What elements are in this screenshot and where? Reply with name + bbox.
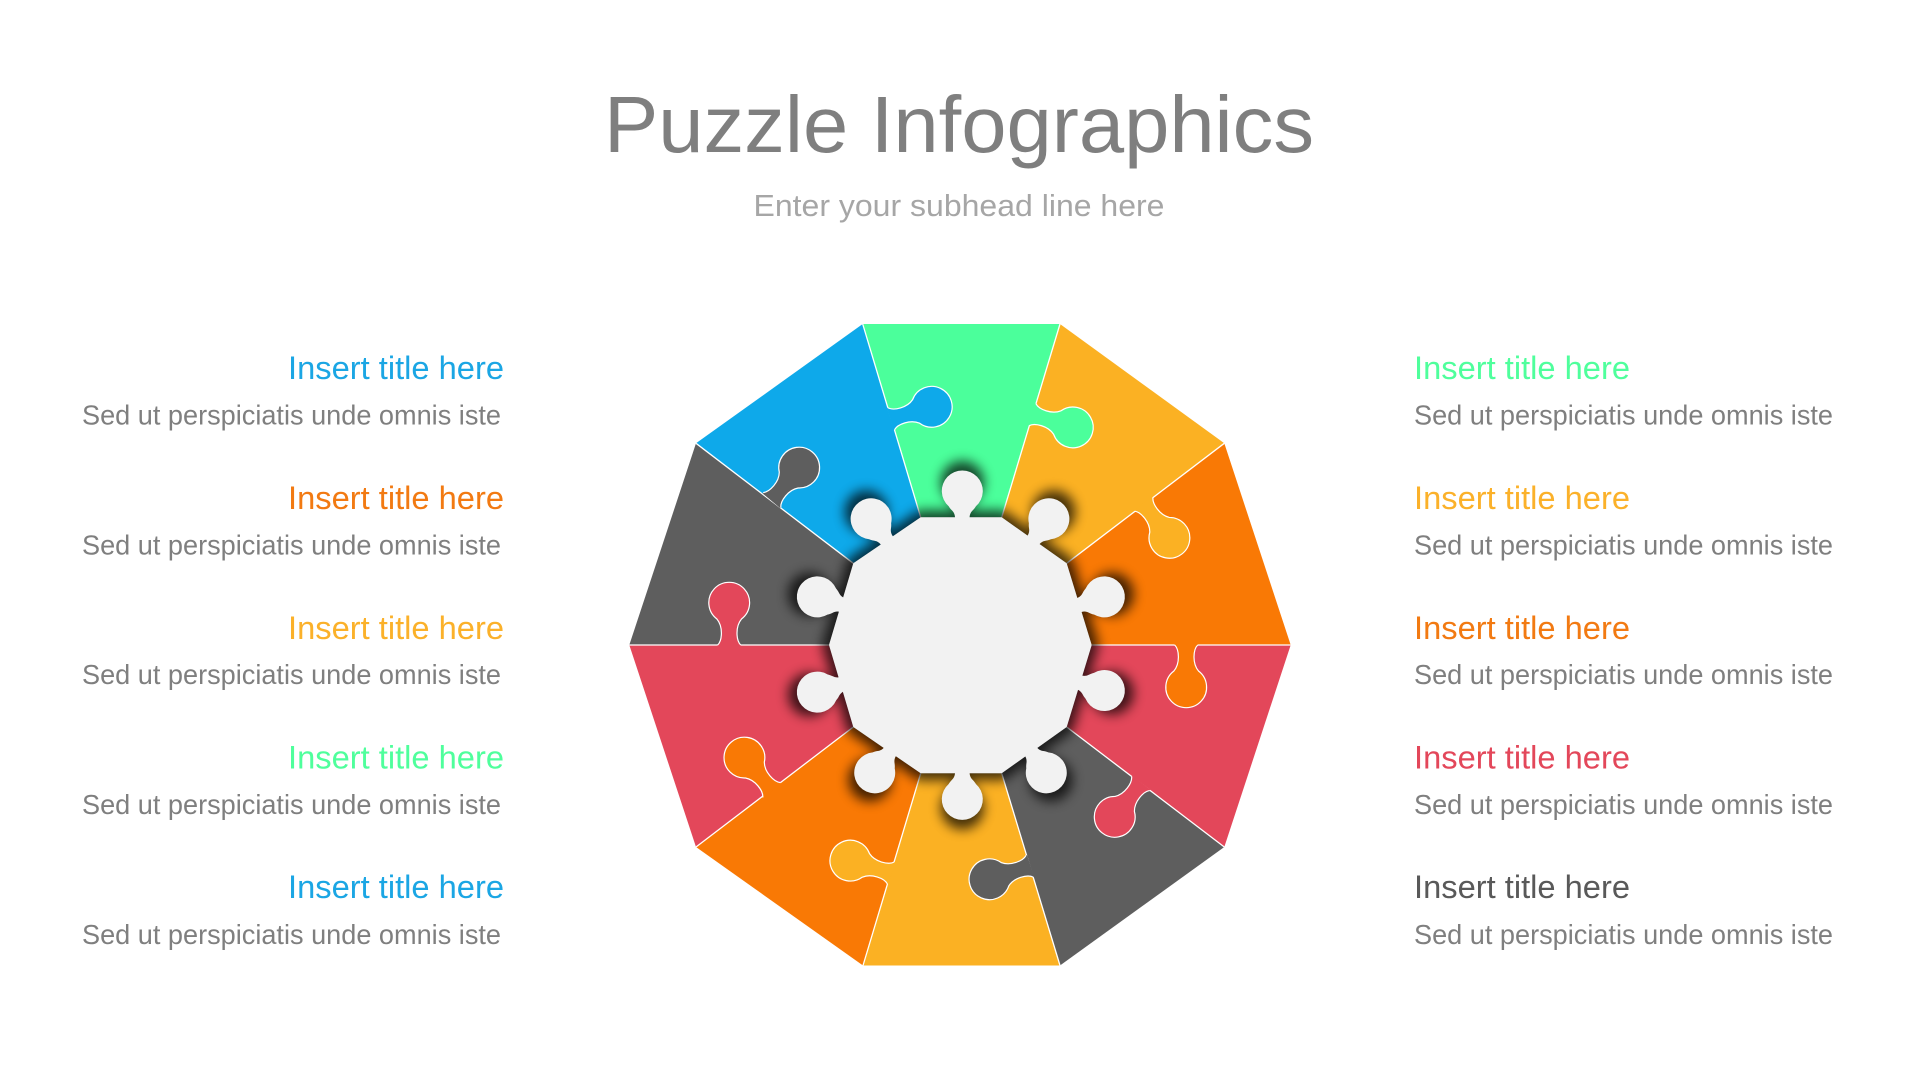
right item 1: Insert title here: [1414, 350, 1630, 386]
piece: yellow bottom: [863, 773, 1060, 966]
tab: gray into blue: [756, 439, 828, 514]
hub shadow: [782, 461, 1140, 829]
left item 4: [82, 740, 504, 820]
right text column: [1414, 350, 1833, 950]
right item 4: Sed ut perspiciatis unde omnis iste: [1414, 789, 1833, 820]
right item 3: Sed ut perspiciatis unde omnis iste: [1414, 659, 1833, 690]
left item 5: [82, 869, 504, 950]
title: Puzzle Infographics: [604, 80, 1314, 169]
left item 1: Insert title here: [288, 350, 504, 386]
piece: green: [863, 324, 1060, 517]
left item 5: Sed ut perspiciatis unde omnis iste: [82, 919, 501, 950]
tab: orange into red left: [716, 729, 788, 804]
center hub: [792, 470, 1130, 820]
tab: red into gray left: [709, 582, 750, 646]
right item 4: [1414, 740, 1833, 820]
tab: yellow into orange: [1127, 491, 1198, 566]
left item 3: Sed ut perspiciatis unde omnis iste: [82, 659, 501, 690]
tab: red into gray: [1086, 770, 1157, 845]
left item 5: Insert title here: [288, 869, 504, 905]
piece: gray bottom right: [1002, 727, 1224, 966]
tab: green into yellow: [1025, 395, 1098, 453]
left item 2: Sed ut perspiciatis unde omnis iste: [82, 530, 501, 560]
tab: blue into green: [884, 381, 957, 439]
piece: gray left: [629, 443, 853, 645]
right item 2: Sed ut perspiciatis unde omnis iste: [1414, 530, 1833, 560]
right item 4: Insert title here: [1414, 740, 1630, 776]
piece seams: [629, 324, 1291, 966]
tab: orange into red: [1166, 644, 1207, 708]
right item 3: Insert title here: [1414, 610, 1630, 646]
right item 1: Sed ut perspiciatis unde omnis iste: [1414, 400, 1833, 430]
tab: yellow into orange bottom: [825, 835, 898, 893]
piece: red right: [1067, 645, 1291, 847]
piece: orange bottom left: [696, 727, 921, 966]
subhead: Enter your subhead line here: [754, 188, 1164, 223]
right item 5: [1414, 869, 1833, 950]
right item 1: [1414, 350, 1833, 430]
piece: orange right: [1067, 443, 1291, 645]
right item 2: [1414, 480, 1833, 560]
right item 2: Insert title here: [1414, 480, 1630, 516]
right item 5: Sed ut perspiciatis unde omnis iste: [1414, 919, 1833, 950]
left item 2: [82, 480, 504, 560]
left item 3: Insert title here: [288, 610, 504, 646]
right item 5: Insert title here: [1414, 869, 1630, 905]
piece: blue: [696, 324, 921, 563]
left text column: [82, 350, 504, 950]
left item 1: [82, 350, 504, 430]
left item 4: Sed ut perspiciatis unde omnis iste: [82, 789, 501, 820]
right item 3: [1414, 610, 1833, 690]
left item 3: [82, 610, 504, 690]
puzzle wheel: [629, 324, 1291, 966]
piece: yellow top: [1002, 324, 1224, 563]
piece: red left: [629, 645, 853, 847]
left item 4: Insert title here: [288, 740, 504, 776]
tab: gray into yellow: [964, 846, 1037, 905]
left item 1: Sed ut perspiciatis unde omnis iste: [82, 400, 501, 430]
left item 2: Insert title here: [288, 480, 504, 516]
